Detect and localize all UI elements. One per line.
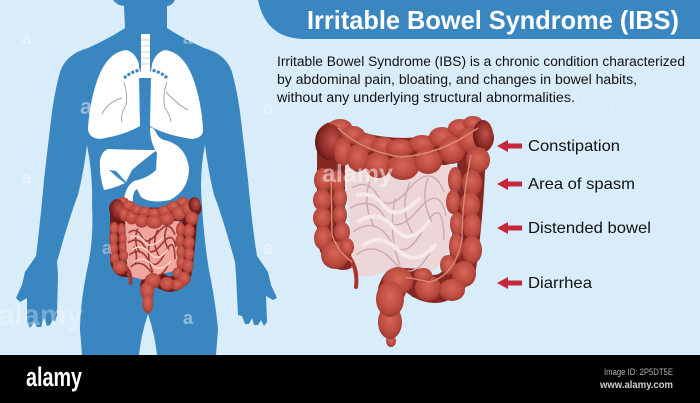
watermarks: a bbox=[22, 29, 32, 48]
small colon bbox=[109, 197, 201, 313]
footer bar bbox=[0, 355, 700, 403]
appendix bbox=[350, 258, 356, 287]
symptom label: diarrhea: Diarrhea bbox=[528, 275, 592, 292]
colon wall bbox=[331, 138, 478, 290]
symptom label: distended bowel: Distended bowel bbox=[528, 220, 651, 237]
icon: lungs bbox=[88, 34, 203, 139]
watermarks: a bbox=[263, 98, 274, 119]
watermarks: a bbox=[80, 94, 93, 119]
description text: Irritable Bowel Syndrome (IBS) is a chronic condition characterized bbox=[277, 54, 685, 69]
description text: by abdominal pain, bloating, and changes in bowel habits, bbox=[277, 72, 637, 87]
watermarks: a bbox=[263, 238, 274, 258]
symptom label: diarrhea bbox=[497, 275, 592, 292]
footer logo: alamy bbox=[26, 362, 82, 392]
watermarks: alamy bbox=[322, 160, 393, 188]
watermarks bbox=[0, 29, 629, 332]
watermarks: a bbox=[183, 308, 194, 328]
description text bbox=[276, 54, 685, 105]
footer image id: Image ID: 2P5DT5E bbox=[604, 367, 673, 377]
colon segments bbox=[313, 116, 493, 347]
watermarks: alamy bbox=[560, 89, 629, 116]
body silhouette bbox=[16, 0, 277, 355]
symptom label: constipation: Constipation bbox=[528, 138, 620, 155]
large colon diagram bbox=[313, 116, 493, 347]
header banner bbox=[258, 0, 700, 39]
watermarks: a bbox=[183, 29, 193, 48]
symptom label: area of spasm: Area of spasm bbox=[528, 176, 635, 193]
small intestine bbox=[345, 165, 452, 277]
description text: without any underlying structural abnormalities. bbox=[276, 90, 575, 105]
watermarks: alamy bbox=[0, 299, 83, 332]
icon: liver bbox=[100, 149, 157, 190]
footer url: www.alamy.com bbox=[599, 380, 673, 391]
icon: stomach bbox=[124, 128, 189, 204]
watermarks: a bbox=[102, 238, 113, 258]
watermarks: a bbox=[22, 168, 32, 187]
title: Irritable Bowel Syndrome (IBS) bbox=[307, 5, 679, 35]
